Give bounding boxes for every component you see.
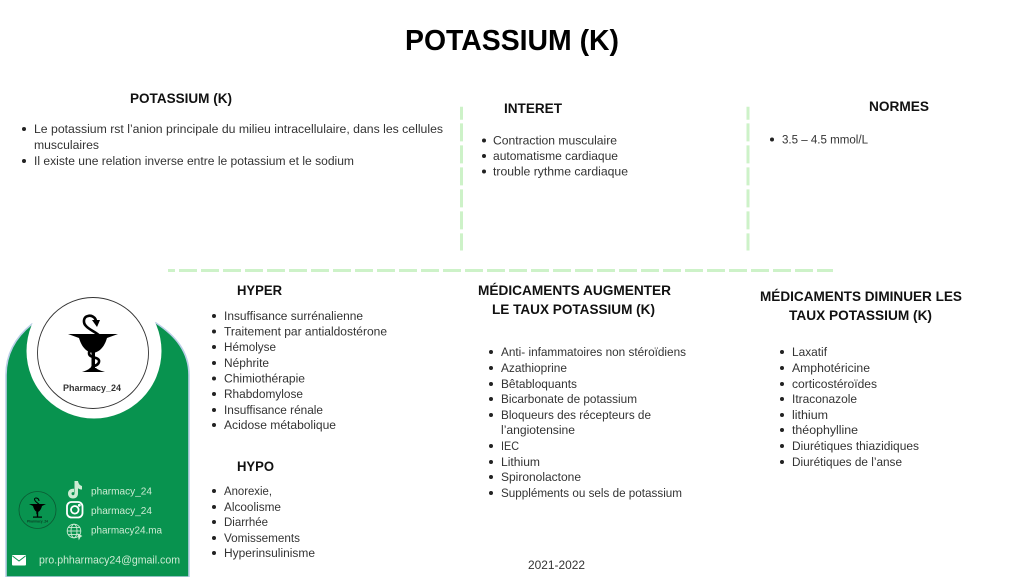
social handles: pharmacy_24 bbox=[91, 506, 152, 517]
text block: diminuer list: Amphotéricine bbox=[792, 361, 870, 375]
icon: instagram bbox=[67, 502, 82, 518]
social handles: pro.phharmacy24@gmail.com bbox=[39, 554, 180, 566]
small logo: Pharmacy_24 bbox=[27, 520, 48, 524]
text block: hypo list: Anorexie, bbox=[224, 484, 272, 498]
panel: potassium definition bbox=[22, 91, 443, 168]
panel: green contact card bbox=[6, 284, 189, 577]
text block: hyper list: Acidose métabolique bbox=[224, 418, 336, 432]
heading: medicaments diminuer bbox=[760, 289, 962, 323]
text block: definition list: Le potassium rst l’anion principale du milieu intracellulaire, dans les cellules bbox=[34, 122, 443, 136]
text block: hyper list: Insuffisance surrénalienne bbox=[224, 309, 363, 323]
text block: interet list: Contraction musculaire bbox=[493, 134, 617, 148]
panel: medicaments augmenter bbox=[478, 283, 686, 500]
text block: augmenter list: Azathioprine bbox=[501, 361, 567, 375]
text block: interet list: trouble rythme cardiaque bbox=[493, 164, 628, 178]
heading: hypo: HYPO bbox=[237, 459, 274, 474]
logo name: Pharmacy_24 bbox=[63, 383, 121, 393]
text block: diminuer list: corticostéroïdes bbox=[792, 377, 877, 391]
text block: diminuer list bbox=[780, 345, 919, 469]
card background bbox=[6, 310, 189, 577]
heading: medicaments augmenter: LE TAUX POTASSIUM (K) bbox=[492, 302, 655, 317]
text block: hypo list: Hyperinsulinisme bbox=[224, 546, 315, 560]
text block: definition list bbox=[22, 122, 443, 168]
text block: augmenter list: Lithium bbox=[501, 455, 540, 469]
heading: potassium: POTASSIUM (K) bbox=[130, 91, 232, 106]
text block: augmenter list: Anti- infammatoires non stéroïdiens bbox=[501, 345, 686, 359]
text block: augmenter list: Suppléments ou sels de potassium bbox=[501, 486, 682, 500]
text block: augmenter list: Bêtabloquants bbox=[501, 377, 577, 391]
social handles: pharmacy24.ma bbox=[91, 526, 162, 536]
panel: normes bbox=[770, 99, 929, 146]
text block: diminuer list: théophylline bbox=[792, 423, 858, 437]
heading: hyper: HYPER bbox=[237, 283, 282, 298]
title: POTASSIUM (K) bbox=[405, 25, 619, 57]
icon: envelope bbox=[12, 555, 26, 566]
text block: hypo list bbox=[212, 484, 315, 560]
panel: medicaments diminuer bbox=[760, 289, 962, 469]
text block: augmenter list: Bloqueurs des récepteurs de bbox=[501, 408, 651, 422]
text block: hyper list bbox=[212, 309, 387, 432]
text block: augmenter list: IEC bbox=[501, 439, 519, 453]
text block: definition list: musculaires bbox=[34, 138, 99, 152]
heading: medicaments diminuer: MÉDICAMENTS DIMINUER LES bbox=[760, 289, 962, 304]
text block: hyper list: Néphrite bbox=[224, 356, 269, 370]
text block: augmenter list: Bicarbonate de potassium bbox=[501, 392, 637, 406]
text block: hyper list: Chimiothérapie bbox=[224, 372, 305, 386]
text block: hyper list: Hémolyse bbox=[224, 340, 276, 354]
heading: medicaments augmenter bbox=[478, 283, 671, 317]
icon: bowl of hygieia bbox=[68, 316, 118, 372]
text block: diminuer list: lithium bbox=[792, 408, 828, 422]
text block: augmenter list: Spironolactone bbox=[501, 470, 581, 484]
text block: hypo list: Alcoolisme bbox=[224, 500, 281, 514]
text block: hypo list: Diarrhée bbox=[224, 515, 268, 529]
panel: hypo bbox=[212, 459, 315, 560]
text block: normes value: 3.5 – 4.5 mmol/L bbox=[782, 132, 868, 146]
text block: diminuer list: Laxatif bbox=[792, 345, 828, 359]
text block: hyper list: Insuffisance rénale bbox=[224, 403, 323, 417]
year label: 2021-2022 bbox=[528, 558, 585, 572]
text block: hyper list: Traitement par antialdostérone bbox=[224, 324, 387, 338]
text block: hypo list: Vomissements bbox=[224, 531, 300, 545]
heading: interet: INTERET bbox=[504, 101, 563, 116]
heading: medicaments augmenter: MÉDICAMENTS AUGMENTER bbox=[478, 283, 671, 298]
text block: interet list: automatisme cardiaque bbox=[493, 149, 618, 163]
text block: interet list bbox=[482, 134, 628, 178]
icon: tiktok bbox=[68, 481, 82, 498]
text block: diminuer list: Itraconazole bbox=[792, 392, 857, 406]
heading: medicaments diminuer: TAUX POTASSIUM (K) bbox=[789, 308, 932, 323]
icon: globe bbox=[67, 524, 82, 539]
text block: augmenter list: l’angiotensine bbox=[501, 423, 575, 437]
text block: diminuer list: Diurétiques de l’anse bbox=[792, 455, 902, 469]
text block: definition list: Il existe une relation inverse entre le potassium et le sodium bbox=[34, 154, 354, 168]
logo badge bbox=[25, 284, 162, 418]
panel: hyper bbox=[212, 283, 387, 432]
social handles bbox=[39, 486, 180, 566]
heading: normes: NORMES bbox=[869, 99, 929, 114]
small logo bbox=[19, 492, 56, 528]
social handles: pharmacy_24 bbox=[91, 486, 152, 498]
text block: diminuer list: Diurétiques thiazidiques bbox=[792, 439, 919, 453]
panel: interet bbox=[482, 101, 628, 178]
text block: hyper list: Rhabdomylose bbox=[224, 387, 303, 401]
text block: augmenter list bbox=[489, 345, 686, 500]
